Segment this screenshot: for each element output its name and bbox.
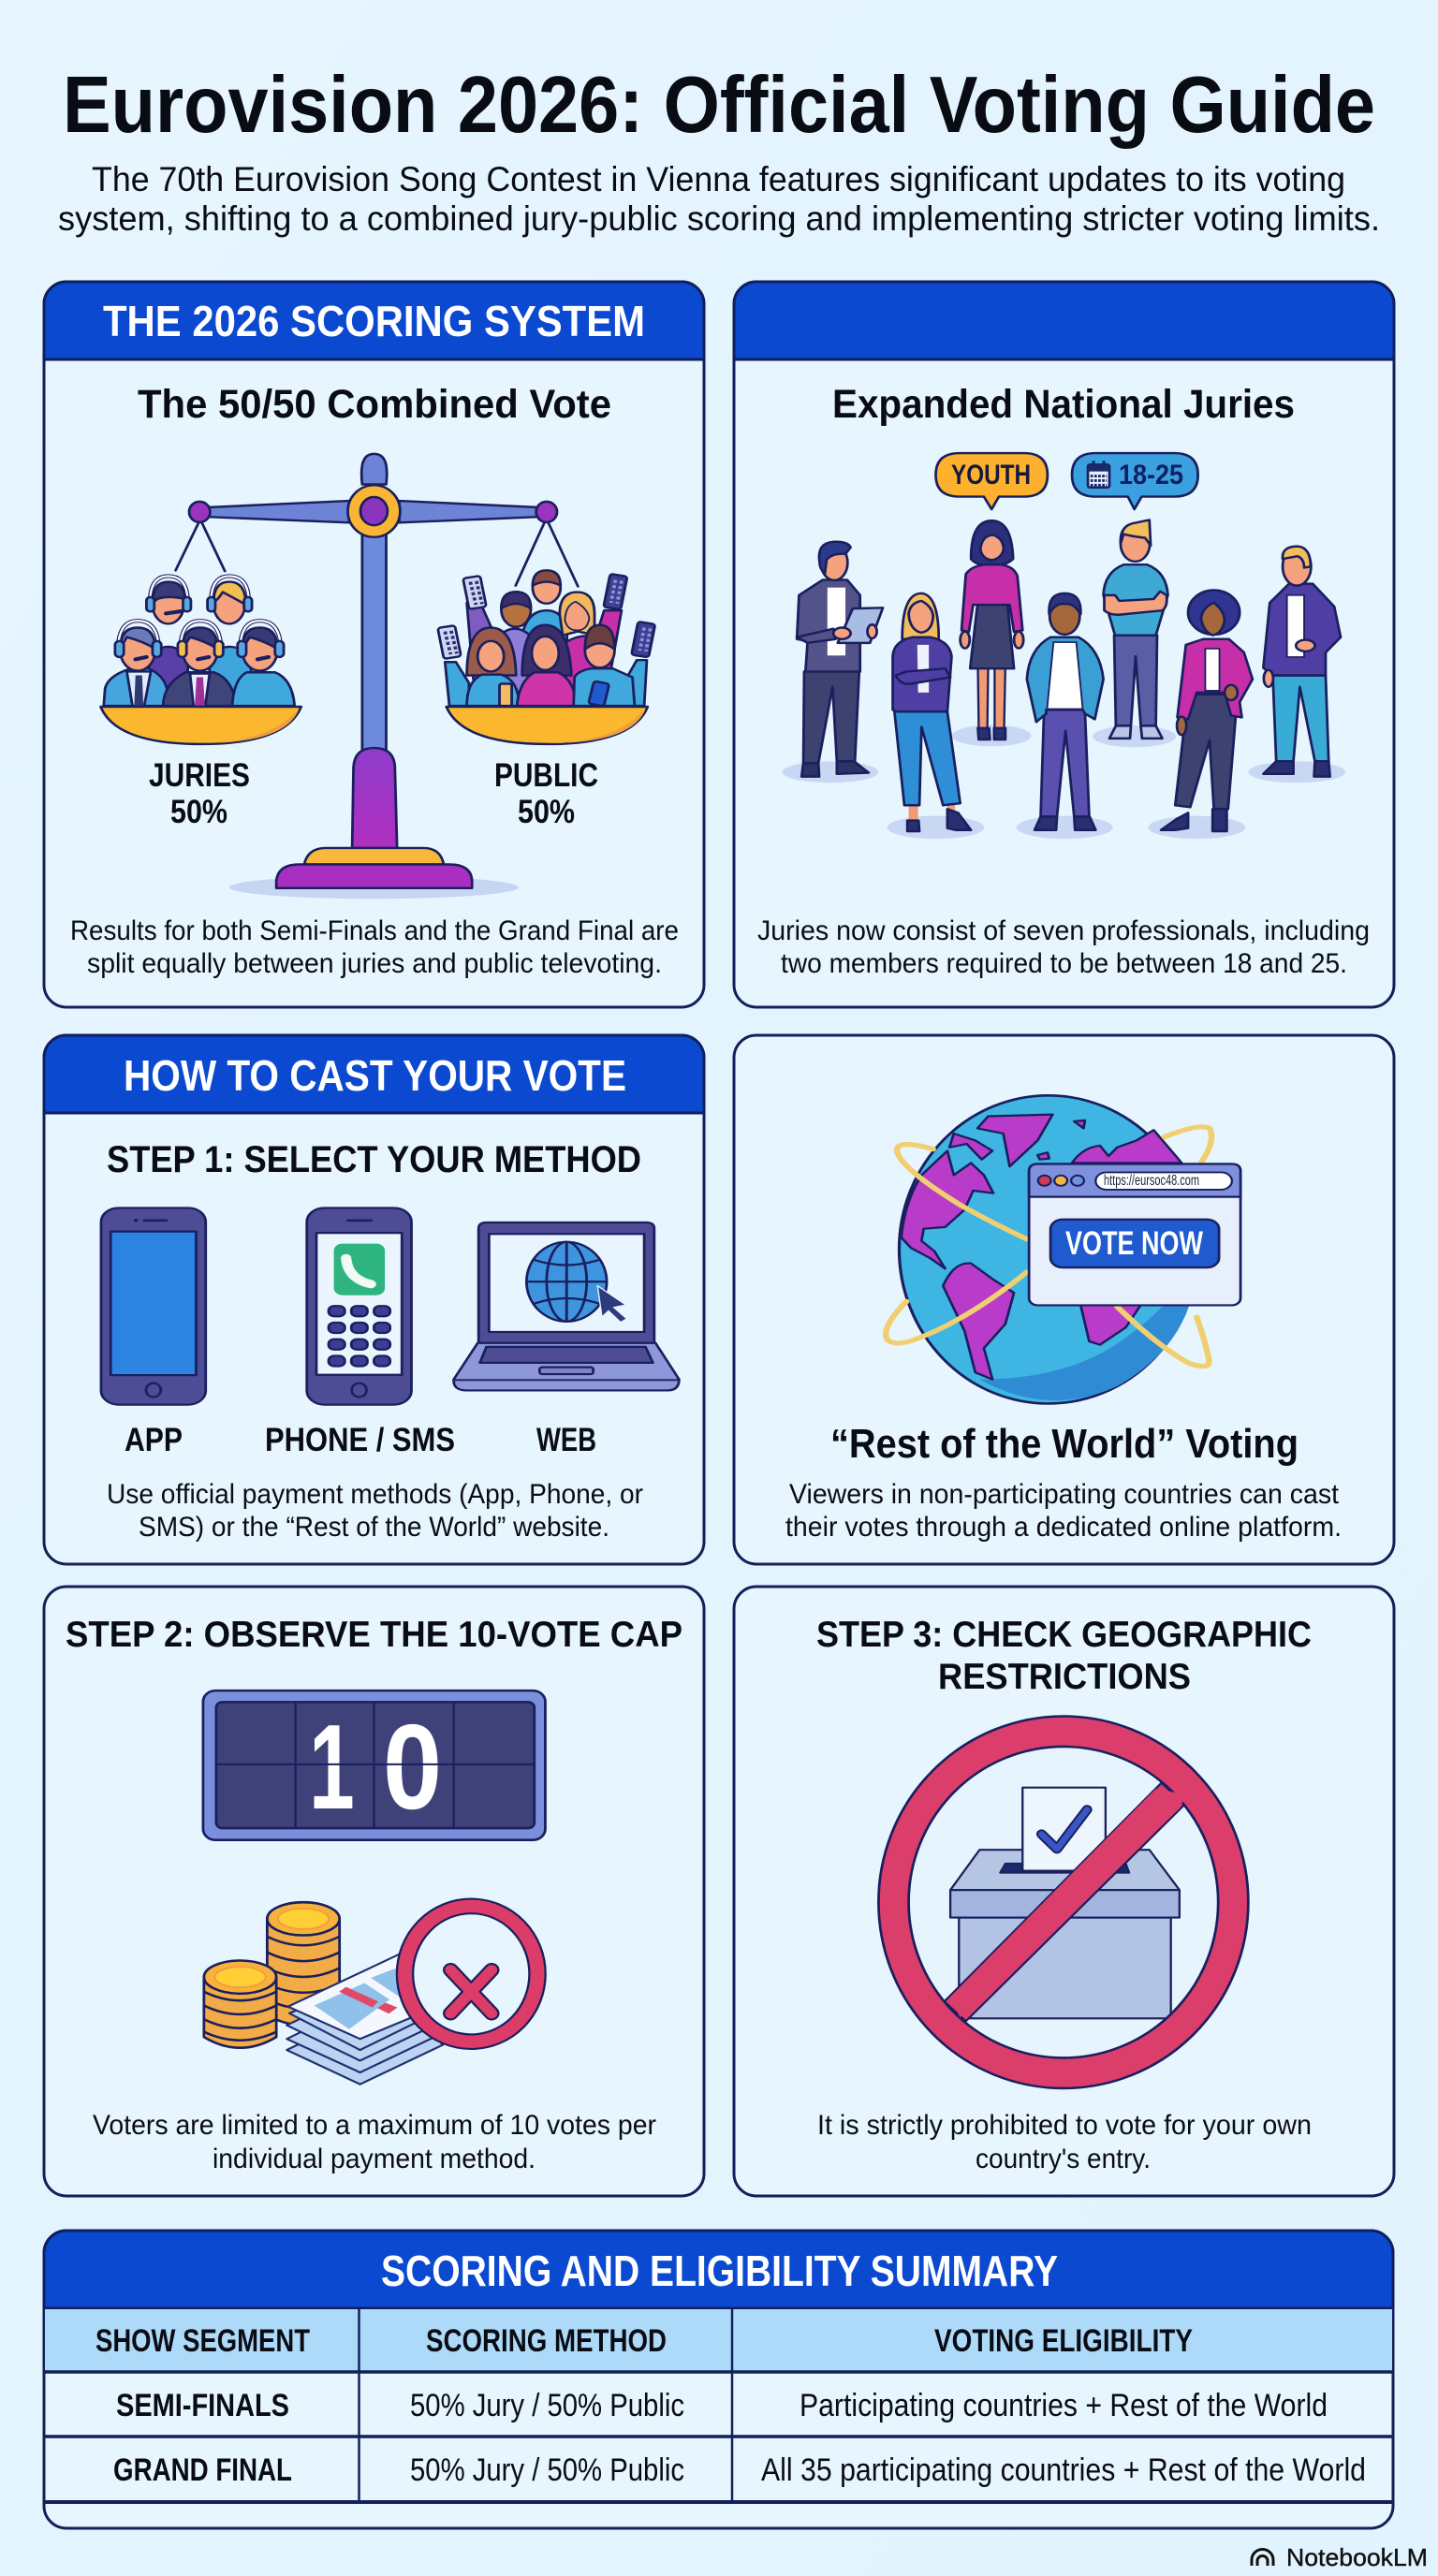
row: grand final: All 35 participating countries + Rest of the World [761,2452,1366,2488]
description [107,1479,643,1543]
panel header bar [44,1035,704,1113]
subtitle [58,160,1380,238]
panel: rest of the world voting [734,1035,1394,1564]
panel: the 2026 scoring system [44,282,704,1007]
table column header row: SHOW SEGMENT [95,2323,310,2359]
description: Use official payment methods (App, Phone, or [107,1479,643,1510]
row: semi-finals: 50% Jury / 50% Public [410,2388,684,2423]
icon: short coin stack [204,1960,276,2048]
method labels: PHONE / SMS [265,1422,455,1458]
row: semi-finals [116,2388,1328,2423]
icon: prohibition circle with cross [405,1906,537,2042]
description: SMS) or the “Rest of the World” website. [139,1512,609,1543]
subtitle: system, shifting to a combined jury-public scoring and implementing stricter voting limits. [58,199,1380,238]
prohibited ballot box illustration [878,1716,1248,2088]
description: individual payment method. [213,2144,536,2174]
description: split equally between juries and public televoting. [87,948,662,979]
icon: laptop with globe [454,1222,679,1390]
description: two members required to be between 18 and 25. [781,948,1347,979]
label: juries 50% [149,757,250,830]
juror: woman in skirt [961,520,1023,739]
table column header row: SCORING METHOD [426,2323,667,2359]
row: grand final: GRAND FINAL [113,2452,292,2488]
sub-heading: The 50/50 Combined Vote [138,382,611,427]
row: grand final [113,2452,1366,2488]
panel header bar [44,282,704,359]
step 2 heading: STEP 2: OBSERVE THE 10-VOTE CAP [66,1615,682,1655]
panel: step 3 geographic restrictions [734,1587,1394,2196]
speech bubble: youth [935,453,1048,509]
url text: https://eursoc48.com [1104,1173,1199,1189]
method labels: APP [125,1422,183,1458]
juror: man in teal jacket [1027,593,1104,830]
globe [899,1095,1197,1403]
NotebookLM logo: NotebookLM [1286,2543,1428,2571]
row: semi-finals: SEMI-FINALS [116,2388,289,2423]
description: Viewers in non-participating countries can cast [789,1479,1340,1510]
description: country's entry. [976,2144,1151,2174]
juror: woman in magenta jacket [1161,591,1253,831]
row: semi-finals: Participating countries + Rest of the World [800,2388,1328,2423]
age range label: 18-25 [1119,460,1183,490]
public group [438,570,655,707]
icon: tall coin stack [267,1902,340,2026]
flip counter showing 10: 0 [383,1699,442,1835]
panel: how to cast your vote [44,1035,704,1564]
globe with browser window illustration [886,1095,1240,1403]
juror: blonde woman [893,593,971,831]
description: their votes through a dedicated online platform. [785,1512,1342,1543]
table heading: SCORING AND ELIGIBILITY SUMMARY [381,2247,1058,2295]
description: It is strictly prohibited to vote for your own [817,2110,1312,2141]
step 1 heading: STEP 1: SELECT YOUR METHOD [107,1139,641,1180]
panel: summary table [44,2231,1393,2528]
icon: ballot box [950,1788,1180,2018]
flip counter showing 10: 1 [309,1700,355,1835]
description [785,1479,1342,1543]
balance scale illustration [101,454,655,899]
orbit rings [886,1127,1211,1367]
description: Juries now consist of seven professionals, including [757,915,1370,946]
juror with tablet [797,542,883,777]
panel: expanded national juries [734,282,1394,1007]
scale pans [101,707,648,744]
description [70,915,679,979]
description: Voters are limited to a maximum of 10 votes per [93,2110,656,2141]
method labels: WEB [536,1422,596,1458]
table column header row: VOTING ELIGIBILITY [934,2323,1193,2359]
flip counter showing 10 [203,1690,545,1840]
section heading: HOW TO CAST YOUR VOTE [124,1051,626,1100]
label: public 50%: 50% [518,794,575,830]
icon: phone with keypad [307,1208,411,1405]
panel: step 2 vote cap [44,1587,704,2196]
row: grand final: 50% Jury / 50% Public [410,2452,684,2488]
sub-heading: “Rest of the World” Voting [830,1421,1299,1467]
table title bar [44,2231,1393,2308]
icon: app smartphone [101,1208,206,1405]
jury members illustration [783,453,1345,839]
speech bubble: 18-25 [1072,453,1198,509]
label: juries 50%: JURIES [149,757,250,794]
section heading: THE 2026 SCORING SYSTEM [103,297,645,345]
subtitle: The 70th Eurovision Song Contest in Vienna features significant updates to its voting [92,160,1345,198]
description [757,915,1370,979]
juror: man in purple jacket [1263,547,1341,777]
vote now button label: VOTE NOW [1065,1225,1203,1262]
juries group [104,576,295,706]
coins and ballots with cross illustration [204,1902,537,2085]
label: public 50%: PUBLIC [494,757,598,794]
description [93,2110,656,2174]
table column header row [45,2309,1392,2372]
icon: prohibition sign [878,1716,1248,2088]
step 3 heading: STEP 3: CHECK GEOGRAPHIC [816,1615,1312,1655]
step 3 heading: RESTRICTIONS [938,1657,1191,1697]
juror: man in t-shirt [1104,520,1167,739]
description [817,2110,1312,2174]
youth label: YOUTH [951,460,1031,490]
icon: check mark [1041,1809,1087,1849]
step 3 heading [816,1615,1312,1697]
icon: ballot papers stack [286,1954,474,2085]
browser window [1029,1164,1240,1305]
sub-heading: Expanded National Juries [832,382,1295,427]
empty header bar [734,282,1394,359]
description: Results for both Semi-Finals and the Grand Final are [70,915,679,946]
label: public 50% [494,757,598,830]
voting method devices [101,1208,679,1405]
label: juries 50%: 50% [170,794,227,830]
method labels [125,1422,596,1458]
